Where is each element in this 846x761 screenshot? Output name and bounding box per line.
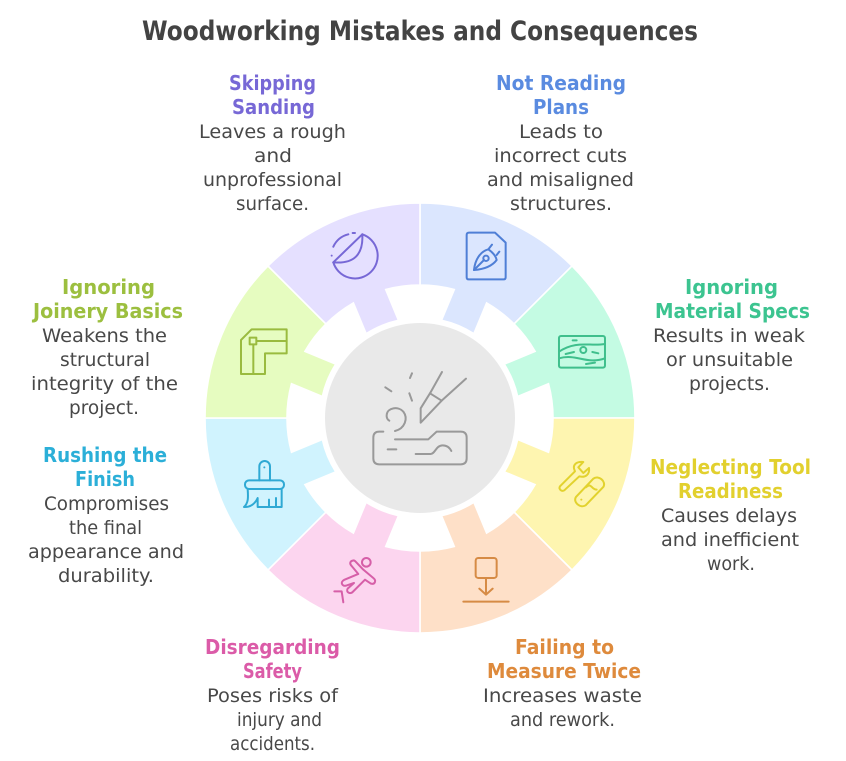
- description: rushing the finish: appearance and: [28, 541, 184, 563]
- heading: skipping sanding: Sanding: [232, 95, 315, 119]
- description: neglecting tool readiness: and inefficient: [661, 529, 799, 551]
- icon: peeling sticker disc: [332, 233, 378, 278]
- description: rushing the finish: durability.: [58, 565, 154, 587]
- heading: rushing the finish: [43, 443, 167, 491]
- text block: rushing the finish: [28, 443, 184, 587]
- wedge: ignoring joinery basics: [190, 260, 361, 456]
- center circle: [325, 323, 515, 513]
- description: ignoring material specs: Results in weak: [653, 325, 805, 347]
- heading: not reading plans: Not Reading: [496, 71, 626, 95]
- heading: disregarding safety: Disregarding: [205, 635, 340, 659]
- heading: failing to measure twice: Measure Twice: [487, 659, 641, 683]
- description: not reading plans: incorrect cuts: [494, 145, 627, 167]
- heading: ignoring material specs: [655, 275, 810, 323]
- icon: falling person: [334, 558, 375, 602]
- heading: neglecting tool readiness: [650, 455, 811, 503]
- wedge: rushing the finish: [190, 380, 361, 576]
- description: skipping sanding: surface.: [236, 193, 309, 215]
- wedge: not reading plans: [382, 188, 578, 359]
- description: not reading plans: and misaligned: [487, 169, 634, 191]
- description: ignoring material specs: or unsuitable: [666, 349, 793, 371]
- segment: ignoring joinery basics: [190, 260, 361, 456]
- description: rushing the finish: Compromises: [44, 493, 169, 515]
- text block: skipping sanding: [199, 71, 346, 215]
- heading: ignoring material specs: Material Specs: [655, 299, 810, 323]
- heading: failing to measure twice: [487, 635, 641, 683]
- description: skipping sanding: [199, 121, 346, 215]
- heading: neglecting tool readiness: Readiness: [678, 479, 783, 503]
- heading: ignoring material specs: Ignoring: [685, 275, 778, 299]
- wedge: neglecting tool readiness: [479, 380, 650, 576]
- description: disregarding safety: [207, 685, 339, 755]
- segment: ignoring material specs: [479, 260, 650, 456]
- segment: failing to measure twice: [382, 477, 578, 648]
- wedge: skipping sanding: [262, 188, 458, 359]
- description: neglecting tool readiness: Causes delays: [661, 505, 797, 527]
- description: rushing the finish: [28, 493, 184, 587]
- description: not reading plans: [487, 121, 634, 215]
- description: disregarding safety: Poses risks of: [207, 685, 339, 707]
- heading: skipping sanding: Skipping: [229, 71, 316, 95]
- icon: pen nib on document: [467, 233, 506, 279]
- heading: disregarding safety: [205, 635, 340, 683]
- description: skipping sanding: unprofessional: [203, 169, 342, 191]
- segment: rushing the finish: [190, 380, 361, 576]
- description: ignoring joinery basics: project.: [69, 397, 139, 419]
- icon: chisel carving wood: [373, 372, 467, 464]
- description: not reading plans: structures.: [510, 193, 612, 215]
- description: ignoring joinery basics: structural: [60, 349, 150, 371]
- icon: wood grain board: [559, 336, 605, 368]
- description: disregarding safety: accidents.: [230, 733, 315, 755]
- heading: not reading plans: Plans: [533, 95, 589, 119]
- heading: rushing the finish: Finish: [75, 467, 135, 491]
- icon: corner joint: [241, 329, 287, 374]
- description: neglecting tool readiness: work.: [707, 553, 755, 575]
- segment: neglecting tool readiness: [479, 380, 650, 576]
- text block: ignoring joinery basics: [31, 275, 183, 419]
- icon: box with down arrow: [463, 558, 509, 602]
- heading: skipping sanding: [229, 71, 316, 119]
- description: failing to measure twice: and rework.: [510, 709, 615, 731]
- description: skipping sanding: and: [254, 145, 292, 167]
- description: not reading plans: Leads to: [519, 121, 603, 143]
- icon: paint brush: [244, 461, 284, 507]
- text block: disregarding safety: [205, 635, 340, 755]
- text block: failing to measure twice: [483, 635, 642, 731]
- wedge: ignoring material specs: [479, 260, 650, 456]
- segment: skipping sanding: [262, 188, 458, 359]
- heading: ignoring joinery basics: [31, 275, 183, 323]
- heading: disregarding safety: Safety: [243, 659, 302, 683]
- description: skipping sanding: Leaves a rough: [199, 121, 346, 143]
- icon: wrench and pocket knife: [560, 462, 604, 506]
- title: Woodworking Mistakes and Consequences: [142, 16, 698, 47]
- heading: rushing the finish: Rushing the: [43, 443, 167, 467]
- text block: not reading plans: [487, 71, 634, 215]
- description: neglecting tool readiness: [661, 505, 799, 575]
- description: failing to measure twice: [483, 685, 642, 731]
- heading: neglecting tool readiness: Neglecting Tool: [650, 455, 811, 479]
- description: failing to measure twice: Increases waste: [483, 685, 642, 707]
- wheel diagram: [190, 188, 650, 648]
- description: ignoring material specs: [653, 325, 805, 395]
- description: disregarding safety: injury and: [237, 709, 322, 731]
- heading: ignoring joinery basics: Joinery Basics: [31, 299, 183, 323]
- heading: not reading plans: [496, 71, 626, 119]
- text block: neglecting tool readiness: [650, 455, 811, 575]
- heading: failing to measure twice: Failing to: [515, 635, 614, 659]
- description: rushing the finish: the final: [69, 517, 142, 539]
- description: ignoring material specs: projects.: [689, 373, 770, 395]
- wedge: disregarding safety: [262, 477, 458, 648]
- heading: ignoring joinery basics: Ignoring: [62, 275, 155, 299]
- description: ignoring joinery basics: [31, 325, 178, 419]
- text block: ignoring material specs: [653, 275, 810, 395]
- wedge: failing to measure twice: [382, 477, 578, 648]
- segment: not reading plans: [382, 188, 578, 359]
- description: ignoring joinery basics: integrity of the: [31, 373, 178, 395]
- description: ignoring joinery basics: Weakens the: [42, 325, 167, 347]
- segment: disregarding safety: [262, 477, 458, 648]
